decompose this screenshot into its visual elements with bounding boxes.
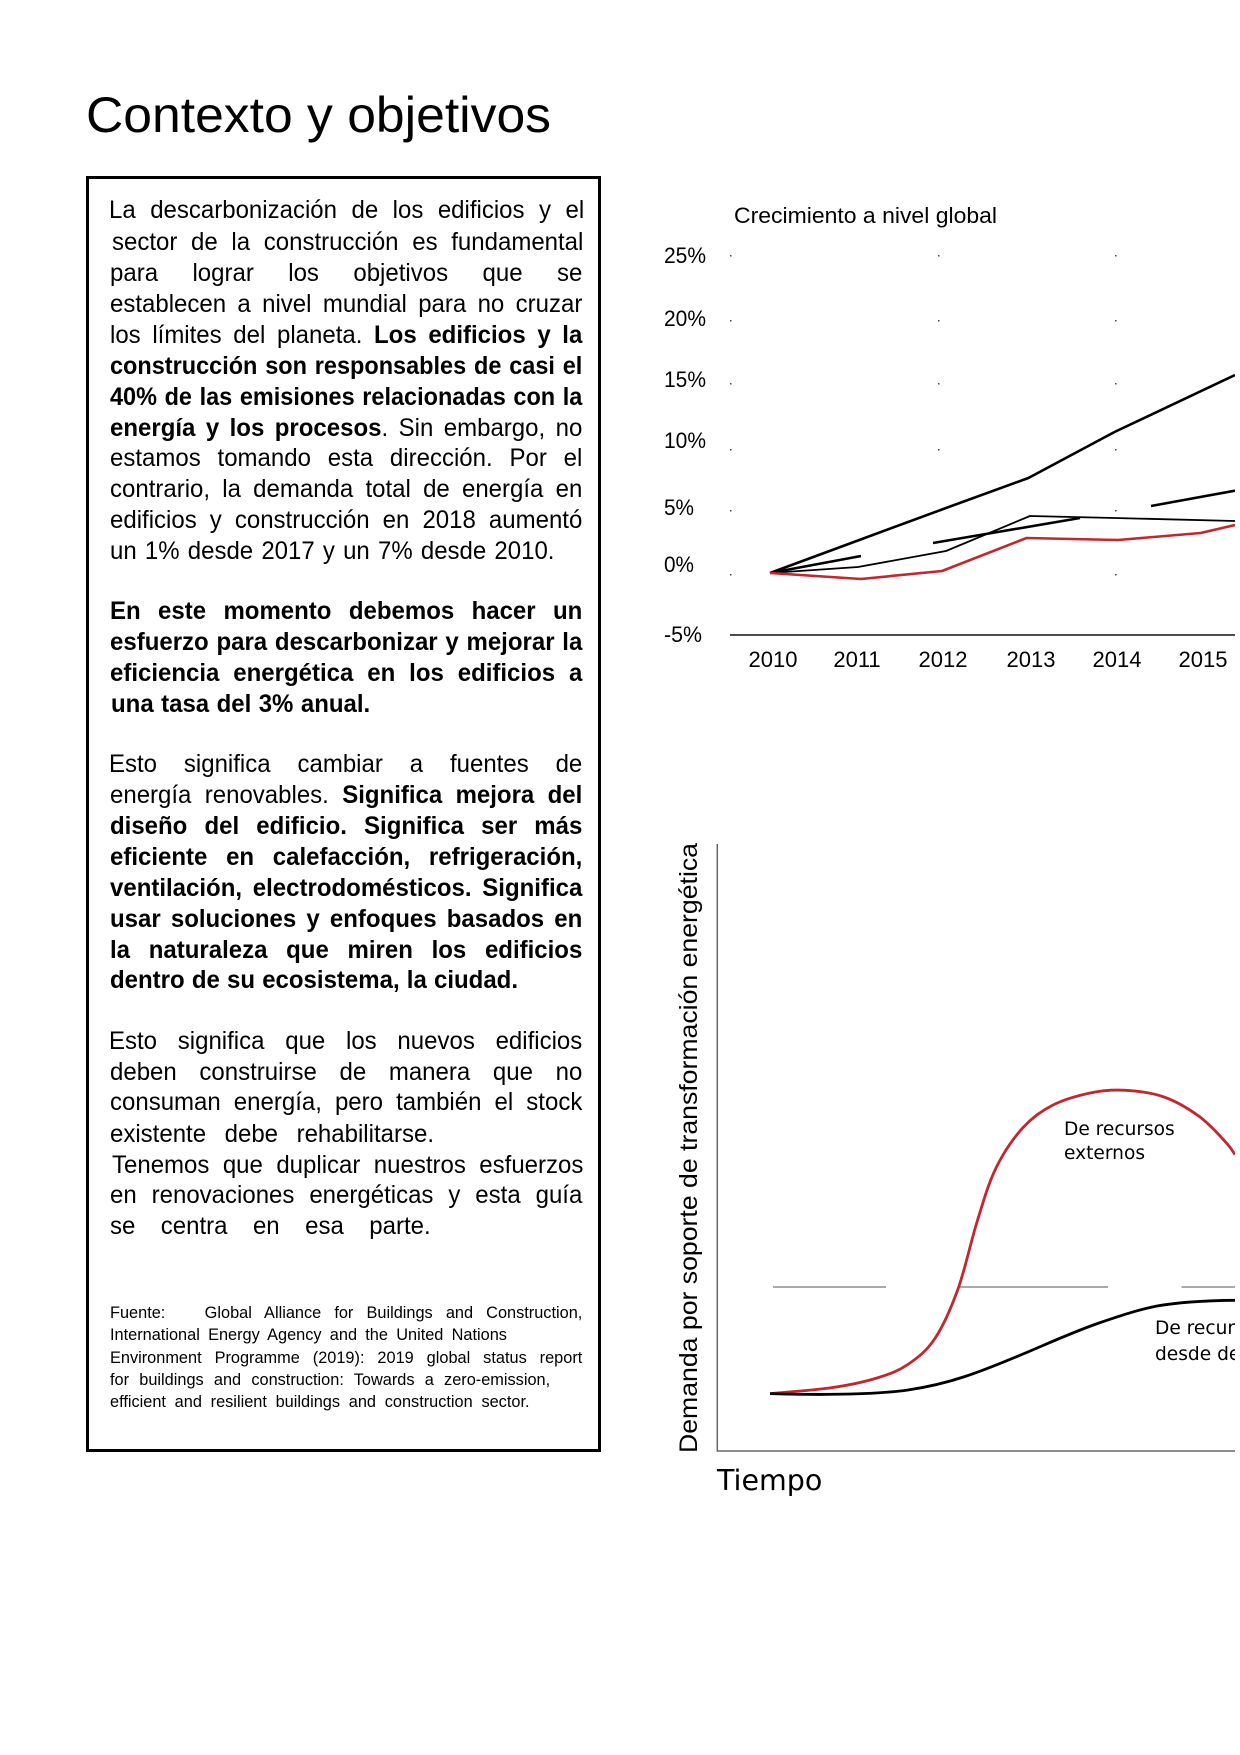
x axis labels: 2015 xyxy=(1179,647,1227,672)
y axis labels: 25% xyxy=(664,243,706,268)
panel: text box: diseño del edificio. Significa ser más xyxy=(110,812,582,840)
panel: text box: sector de la construcción es fundamental xyxy=(112,228,583,256)
panel: text box: for buildings and construction: Towards a zero-emission, xyxy=(110,1370,550,1389)
panel: text box: establecen a nivel mundial para no cruzar xyxy=(110,290,582,318)
paragraph: decarbonisation context xyxy=(109,196,584,565)
curve: external resources xyxy=(770,1090,1235,1394)
panel: text box: International Energy Agency and the United Nations xyxy=(110,1325,507,1344)
x axis labels: 2010 xyxy=(749,647,797,672)
panel: text box: En este momento debemos hacer un xyxy=(110,597,582,625)
panel: text box: usar soluciones y enfoques basados en xyxy=(110,905,582,933)
panel: text box: una tasa del 3% anual. xyxy=(111,690,370,718)
panel: text box: estamos tomando esta dirección. Por el xyxy=(110,444,582,472)
panel: text box: en renovaciones energéticas y esta guía xyxy=(110,1181,582,1209)
x axis labels xyxy=(750,652,1227,667)
panel: text box: un 1% desde 2017 y un 7% desde 2010. xyxy=(110,537,554,565)
panel: text box: dentro de su ecosistema, la ciudad. xyxy=(110,966,518,994)
x axis labels: 2011 xyxy=(833,647,881,672)
panel: text box: contrario, la demanda total de energía en xyxy=(110,475,582,503)
y axis labels: 5% xyxy=(664,495,694,520)
y axis labels: 10% xyxy=(664,428,706,453)
panel: text box: esfuerzo para descarbonizar y mejorar la xyxy=(110,628,582,656)
label: external resources: externos xyxy=(1064,1143,1145,1164)
grey reference lines xyxy=(773,1286,1235,1288)
panel: text box: efficient and resilient buildings and construction sector. xyxy=(110,1392,530,1411)
panel: text box: consuman energía, pero también el stock xyxy=(110,1088,582,1116)
panel: text box: eficiencia energética en los edificios a xyxy=(110,659,582,687)
charts layer xyxy=(664,207,1235,1496)
panel: text box: la naturaleza que miren los edificios xyxy=(110,936,582,964)
panel: text box: energía y los procesos. Sin embargo, no xyxy=(110,414,582,442)
paragraph: 3% annual effort xyxy=(110,597,582,718)
y axis labels: -5% xyxy=(664,622,702,647)
panel: text box: Fuente: Global Alliance for Buildings and Construction, xyxy=(110,1303,582,1322)
series lines xyxy=(770,375,1235,579)
panel: text box xyxy=(86,176,600,1452)
panel: text box: los límites del planeta. Los edificios y la xyxy=(110,321,582,349)
y axis labels: 0% xyxy=(664,552,694,577)
x axis labels: 2014 xyxy=(1093,647,1141,672)
label: external resources: De recursos xyxy=(1064,1119,1175,1140)
y axis labels xyxy=(664,243,706,647)
x axis title: Tiempo xyxy=(716,1464,822,1497)
y axis labels: 15% xyxy=(664,367,706,392)
panel: text box: se centra en esa parte. xyxy=(110,1212,431,1240)
panel: text box: Esto significa que los nuevos edificios xyxy=(109,1027,582,1055)
panel: text box: 40% de las emisiones relacionadas con la xyxy=(110,383,582,411)
y axis labels: 20% xyxy=(664,306,706,331)
panel: text box: La descarbonización de los edificios y el xyxy=(109,196,584,224)
panel: text box: Tenemos que duplicar nuestros esfuerzos xyxy=(112,1151,583,1179)
panel: text box: eficiente en calefacción, refrigeración, xyxy=(110,843,582,871)
paragraph: renewable energy and design xyxy=(109,750,582,994)
panel: text box: energía renovables. Significa mejora del xyxy=(110,781,582,809)
axes xyxy=(717,844,1235,1451)
x axis labels: 2012 xyxy=(919,647,967,672)
title: Contexto y objetivos xyxy=(86,87,551,143)
paragraph: new buildings and renovation xyxy=(109,1027,583,1240)
panel: text box: edificios y construcción en 2018 aumentó xyxy=(110,506,582,534)
y axis title: Demanda por soporte de transformación energética xyxy=(675,843,703,1453)
s-curve chart: energy transformation demand xyxy=(675,843,1240,1497)
panel: text box: ventilación, electrodomésticos. Significa xyxy=(110,874,582,902)
chart title: Crecimiento a nivel global xyxy=(734,203,997,228)
x axis labels: 2013 xyxy=(1007,647,1055,672)
panel: text box: existente debe rehabilitarse. xyxy=(110,1120,434,1148)
panel: text box: Esto significa cambiar a fuentes de xyxy=(109,750,582,778)
panel: text box: construcción son responsables de casi el xyxy=(110,352,582,380)
panel: text box: deben construirse de manera que no xyxy=(110,1058,582,1086)
line chart: global growth xyxy=(664,203,1235,672)
source note xyxy=(110,1303,582,1411)
panel: text box: para lograr los objetivos que se xyxy=(110,259,582,287)
panel: text box: Environment Programme (2019): 2019 global status report xyxy=(110,1348,582,1366)
curve: internal resources xyxy=(770,1300,1235,1394)
